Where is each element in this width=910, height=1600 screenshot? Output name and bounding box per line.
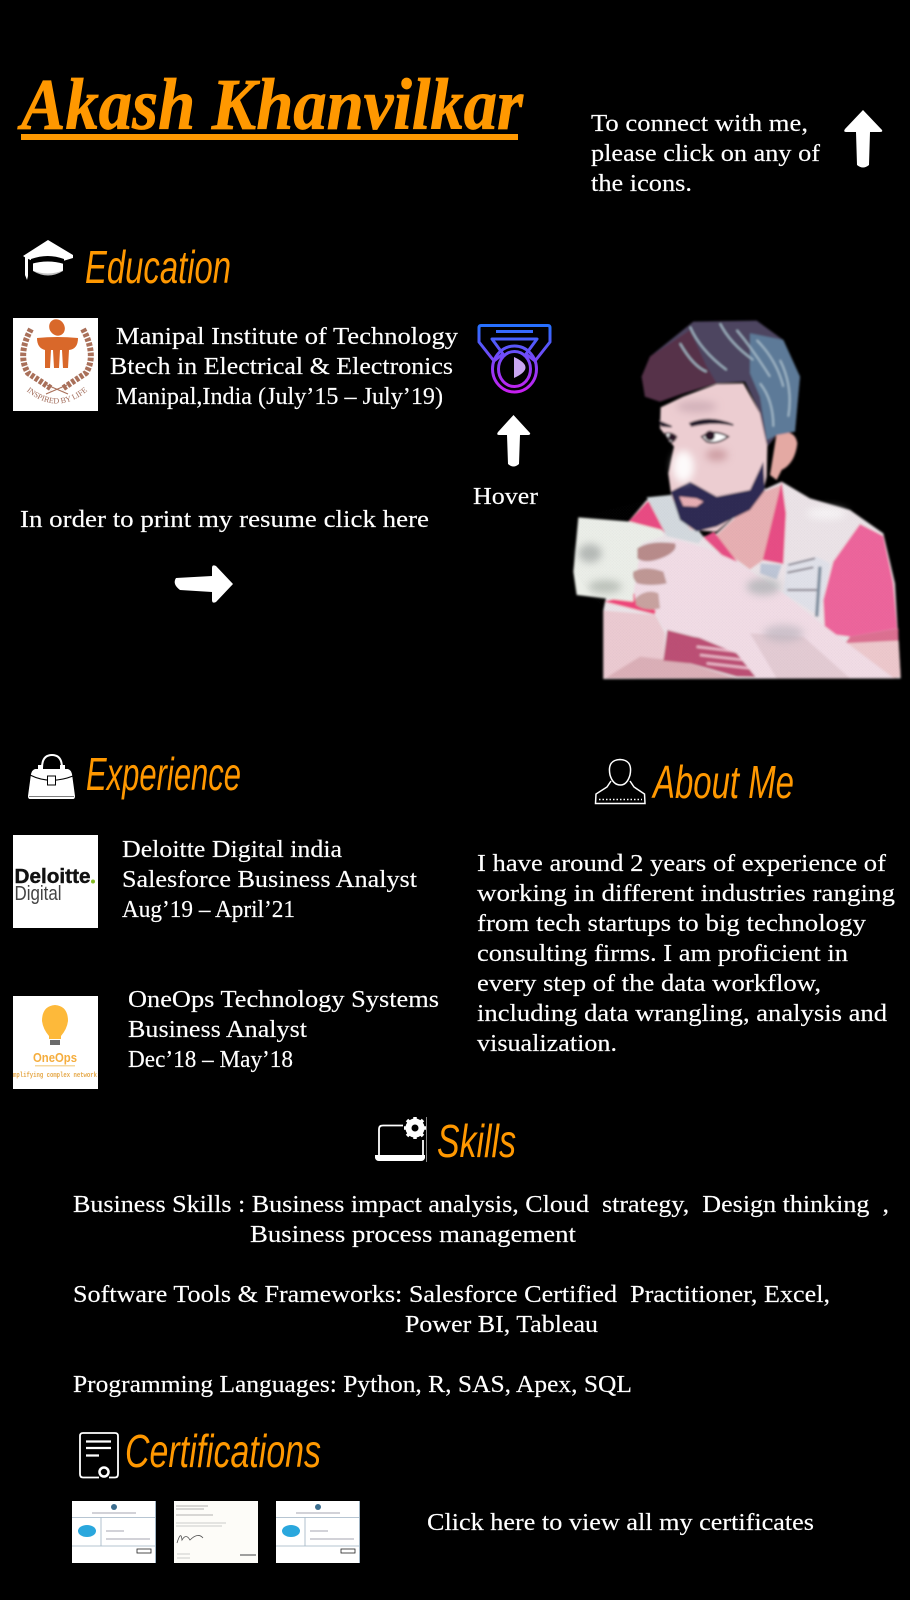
OneOps experience text: OneOps Technology Systems	[128, 986, 439, 1013]
Deloitte experience text: Aug’19 – April’21	[122, 896, 295, 923]
eyebrows	[690, 420, 733, 426]
left sleeve	[628, 501, 667, 535]
forearm and hand	[633, 540, 894, 678]
heading: experience: Experience	[86, 748, 241, 800]
left arm	[603, 611, 665, 679]
about me text	[477, 850, 895, 1057]
connect note: To connect with me,	[591, 110, 808, 137]
logo: Manipal Institute: INSPIRED BY LIFE	[26, 387, 88, 404]
icon: medal	[479, 326, 550, 392]
logo: OneOps: mplifying complex network	[13, 1072, 97, 1080]
body base	[603, 482, 901, 679]
arrow: up to icons	[844, 110, 882, 168]
hair	[642, 321, 800, 447]
right sleeve	[823, 524, 897, 637]
heading: education	[23, 240, 231, 293]
OneOps experience text	[128, 986, 439, 1073]
connect note: please click on any of	[591, 140, 821, 167]
title: Akash Khanvilkar	[17, 64, 524, 145]
certificate thumbnail 1	[72, 1501, 156, 1563]
skills text	[73, 1191, 889, 1398]
certificate thumbnail 3	[276, 1501, 360, 1563]
logo: Deloitte Digital	[13, 835, 98, 928]
face	[660, 383, 767, 532]
logo: OneOps	[13, 996, 98, 1089]
Deloitte experience text: Deloitte Digital india	[122, 836, 342, 863]
about me text: every step of the data workflow,	[477, 970, 821, 997]
logo: OneOps: OneOps	[33, 1050, 77, 1065]
education text: Btech in Electrical & Electronics	[110, 353, 453, 380]
skills text: Programming Languages: Python, R, SAS, Apex, SQL	[73, 1371, 632, 1398]
print resume note: In order to print my resume click here	[20, 506, 429, 533]
logo: Deloitte Digital: Deloitte	[14, 866, 90, 888]
arrow: right to print	[175, 565, 233, 603]
icon: graduation cap	[23, 240, 73, 280]
portrait shading	[578, 401, 847, 642]
grey shirt collar	[647, 495, 703, 543]
heading: education: Education	[85, 241, 231, 293]
education text: Manipal,India (July’15 – July’19)	[116, 383, 443, 410]
about me text: from tech startups to big technology	[477, 910, 867, 937]
beard	[671, 462, 765, 532]
neck	[717, 485, 783, 569]
education text	[110, 323, 459, 410]
heading: certifications	[80, 1425, 321, 1478]
Deloitte experience text: Salesforce Business Analyst	[122, 866, 417, 893]
lips	[679, 497, 703, 507]
portrait illustration	[573, 321, 901, 679]
heading: experience	[28, 748, 241, 800]
skills text: Business Skills : Business impact analysis, Cloud strategy, Design thinking ,	[73, 1191, 889, 1218]
connect note: the icons.	[591, 170, 692, 197]
OneOps experience text: Business Analyst	[128, 1016, 307, 1043]
heading: skills	[375, 1115, 516, 1167]
skills text: Software Tools & Frameworks: Salesforce Certified Practitioner, Excel,	[73, 1281, 830, 1308]
ear	[770, 432, 797, 480]
heading: certifications: Certifications	[125, 1425, 321, 1477]
education text: Manipal Institute of Technology	[116, 323, 459, 350]
about me text: I have around 2 years of experience of	[477, 850, 887, 877]
about me text: including data wrangling, analysis and	[477, 1000, 887, 1027]
arrow: up to medal	[497, 415, 530, 466]
skills text: Power BI, Tableau	[405, 1311, 598, 1338]
heading: about me: About Me	[651, 756, 794, 808]
cup	[573, 517, 663, 602]
shirt placket	[783, 557, 830, 617]
logo: Deloitte Digital: Digital	[14, 883, 62, 905]
icon: laptop with gear	[375, 1117, 427, 1162]
icon: briefcase handbag	[28, 755, 75, 799]
skills text: Business process management	[250, 1221, 576, 1248]
logo: Manipal Institute	[13, 318, 98, 411]
collar	[763, 482, 786, 564]
icon: certificate	[80, 1433, 118, 1478]
OneOps experience text: Dec’18 – May’18	[128, 1046, 293, 1073]
eyes	[702, 432, 728, 443]
hover label: Hover	[473, 483, 538, 510]
halftone overlay	[573, 482, 901, 679]
fingers	[637, 542, 676, 561]
about me text: working in different industries ranging	[477, 880, 895, 907]
connect note	[591, 110, 821, 197]
Deloitte experience text	[122, 836, 417, 923]
icon: person	[596, 760, 645, 804]
certificate thumbnail 2	[174, 1501, 258, 1563]
pink lower shirt	[663, 630, 781, 677]
heading: skills: Skills	[437, 1115, 516, 1167]
about me text: consulting firms. I am proficient in	[477, 940, 848, 967]
about me text: visualization.	[477, 1030, 617, 1057]
heading: about me	[596, 756, 794, 808]
certificates link text: Click here to view all my certificates	[427, 1509, 814, 1536]
